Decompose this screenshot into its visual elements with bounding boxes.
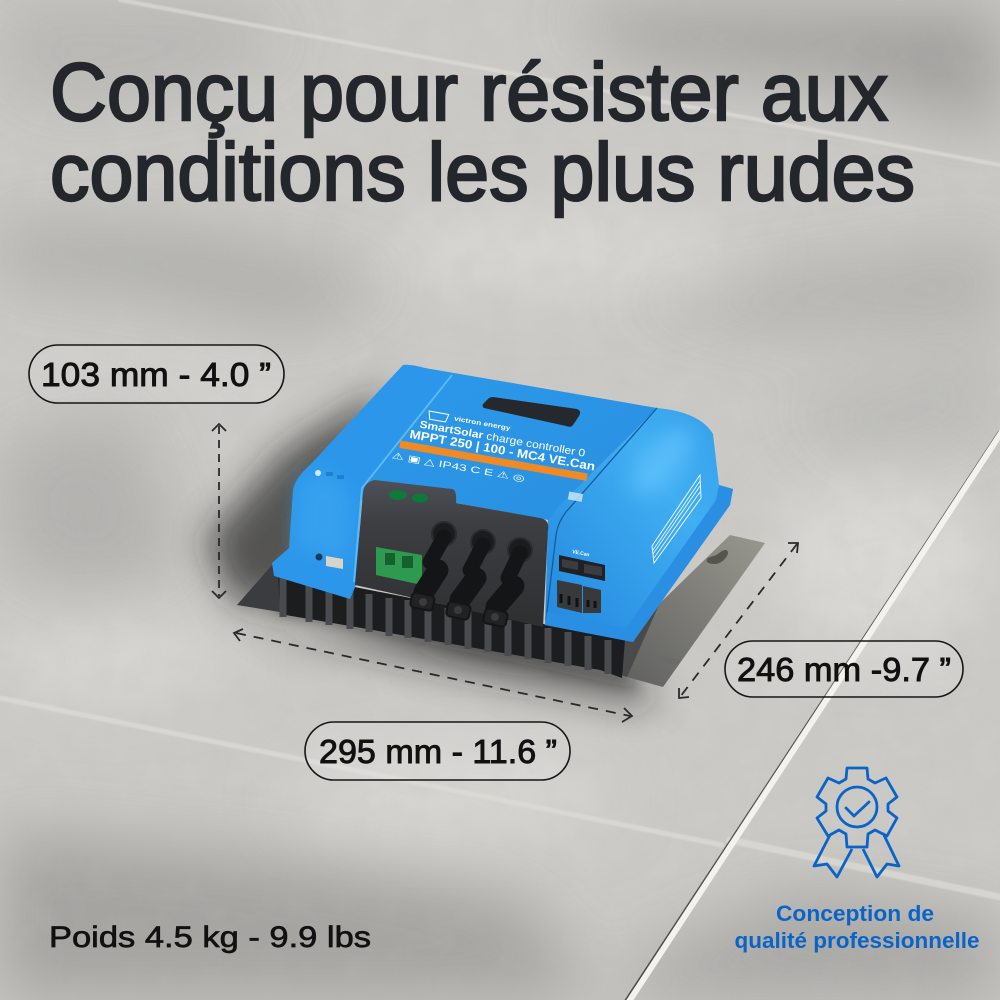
black connector box (355, 480, 548, 627)
battery ports (389, 490, 428, 502)
quality caption: Conception de (776, 901, 934, 926)
product shadow (205, 385, 665, 705)
display slot (482, 397, 580, 427)
mounting plate left (237, 565, 292, 612)
green terminal (376, 547, 422, 585)
title: Conçu pour résister aux (50, 47, 888, 138)
quality caption: qualité professionnelle (734, 928, 980, 953)
product labels: victron energy (454, 415, 511, 432)
pill: depth: 246 mm -9.7 ” (737, 651, 951, 688)
blue left end cap (272, 365, 452, 599)
rating label (652, 475, 701, 563)
dimension: height arrow (212, 424, 226, 598)
VE.Can ports (559, 549, 605, 581)
title (50, 47, 915, 218)
title: conditions les plus rudes (50, 127, 915, 218)
product labels: SmartSolar charge controller 0 (419, 419, 586, 460)
weight text: Poids 4.5 kg - 9.9 lbs (49, 921, 371, 954)
product: MPPT charge controller (237, 365, 765, 687)
pill: width (305, 722, 570, 780)
blue top face (358, 365, 657, 525)
product labels: ⚠ ▣ △ IP43 C E ⚠ ◎ (391, 450, 526, 484)
icon: quality badge (814, 768, 899, 877)
pill: height: 103 mm - 4.0 ” (41, 356, 271, 393)
MC4 connectors (410, 522, 532, 627)
terminal blocks (557, 580, 601, 613)
pill: depth (725, 641, 963, 697)
USB port (316, 554, 343, 569)
pill: width: 295 mm - 11.6 ” (319, 733, 557, 770)
pill: height (29, 345, 284, 403)
dimension: width arrow (234, 629, 632, 722)
product labels (390, 406, 599, 503)
LED indicators (315, 470, 344, 479)
blue right end cap (545, 408, 733, 642)
dimension: depth arrow (679, 543, 798, 698)
VE.Can ports: VE.Can (572, 549, 590, 558)
heat sink (278, 572, 625, 678)
quality caption (734, 901, 980, 953)
mounting plate right (612, 510, 765, 687)
product labels: MPPT 250 | 100 - MC4 VE.Can (409, 427, 596, 474)
